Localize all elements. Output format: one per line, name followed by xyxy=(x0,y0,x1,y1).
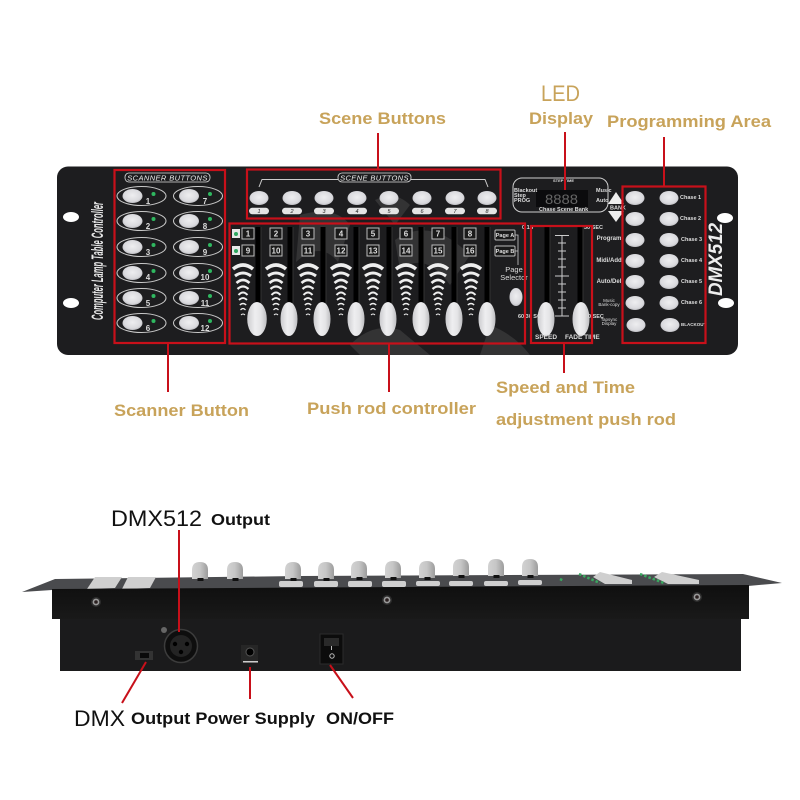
channel number boxes: 4 xyxy=(339,230,344,238)
function labels and bank arrows: BANK xyxy=(610,206,626,212)
panel: scanner buttons: 8 xyxy=(203,222,208,231)
label: DMX512 Output: Output xyxy=(211,512,271,529)
channel number boxes: 3 xyxy=(306,230,311,238)
panel: programming buttons: Chase 1 xyxy=(680,195,701,201)
function labels and bank arrows: Display xyxy=(602,321,617,326)
power switch xyxy=(320,634,343,664)
panel: speed and fade faders: 60 30 SC xyxy=(518,314,541,320)
panel: scanner buttons: 9 xyxy=(203,248,208,257)
panel: scene buttons: 6 xyxy=(420,209,424,215)
panel: speed and fade faders: 30 SEC xyxy=(584,225,603,231)
channel number boxes: 16 xyxy=(466,246,475,256)
scanner title: SCANNER BUTTONS xyxy=(127,174,208,182)
page selector: Page A xyxy=(496,233,514,239)
panel: speed and fade faders: FADE TIME xyxy=(565,334,600,341)
panel: scanner buttons: 11 xyxy=(201,299,210,308)
side text: DMX512: DMX512 xyxy=(706,223,727,296)
top plate xyxy=(22,574,782,592)
panel: scanner buttons: 6 xyxy=(146,324,151,333)
panel: scene buttons xyxy=(249,173,497,215)
page selector xyxy=(495,230,528,306)
heading: Scene Buttons: Scene Buttons xyxy=(319,109,446,128)
function labels and bank arrows: Midi/Add xyxy=(596,258,622,264)
channel number boxes: 6 xyxy=(404,230,409,238)
channel number boxes: 1 xyxy=(246,230,251,238)
panel body xyxy=(57,166,738,355)
label: Output Power Supply: Output Power Supply xyxy=(131,709,316,728)
panel: programming buttons: Chase 5 xyxy=(681,279,702,285)
panel: scanner buttons: 10 xyxy=(201,273,210,282)
panel: scene buttons: 3 xyxy=(322,209,326,215)
label: DMX512 Output: DMX512 xyxy=(111,506,202,531)
rear knobs xyxy=(192,559,538,581)
channel number boxes xyxy=(232,228,476,256)
label: DMX512 Output xyxy=(111,506,271,531)
panel: LED display: STEP TIME xyxy=(553,178,574,183)
function labels and bank arrows: Auto/Del xyxy=(597,279,622,285)
upper chassis xyxy=(52,585,749,619)
channel number boxes: 13 xyxy=(369,246,378,256)
panel: scanner buttons: 3 xyxy=(146,248,151,257)
page selector: Page B xyxy=(496,249,514,255)
channel number boxes: 2 xyxy=(274,230,279,238)
panel: LED display: Step xyxy=(514,193,527,199)
heading: Display: Display xyxy=(529,109,594,128)
panel: LED display: Music xyxy=(596,188,612,194)
device: front panel xyxy=(57,166,738,355)
function labels and bank arrows: Music xyxy=(603,298,616,303)
device: front panel: Computer Lamp Table Controller xyxy=(88,201,107,320)
channel number boxes: 5 xyxy=(371,230,376,238)
panel: scanner buttons: 2 xyxy=(146,222,151,231)
heading: Programming Area: Programming Area xyxy=(607,112,772,131)
channel number boxes: 14 xyxy=(402,246,411,256)
scene title xyxy=(259,173,488,187)
panel: speed and fade faders: 0.1S xyxy=(522,225,534,231)
heading: LED: LED xyxy=(541,81,580,106)
red highlight boxes xyxy=(114,170,706,344)
panel: programming buttons: BLACKOUT xyxy=(681,322,706,327)
channel number boxes: 7 xyxy=(436,230,441,238)
panel: programming buttons: Chase 6 xyxy=(681,300,702,306)
panel: scanner buttons: 5 xyxy=(146,299,151,308)
mounting holes xyxy=(63,212,734,308)
panel: scene buttons: 4 xyxy=(355,209,359,215)
panel: LED display xyxy=(513,178,612,213)
panel: scene buttons: 8 xyxy=(485,209,489,215)
label: Speed and Time: Speed and Time xyxy=(496,378,635,397)
screws xyxy=(91,592,702,607)
panel: scene buttons: 5 xyxy=(387,209,391,215)
label: adjustment push rod: adjustment push rod xyxy=(496,410,676,429)
panel: speed and fade faders xyxy=(518,225,604,341)
device: rear panel xyxy=(22,559,782,671)
panel: scanner buttons: 1 xyxy=(146,197,151,206)
watermark xyxy=(296,196,530,355)
flat button tops xyxy=(87,572,699,589)
channel number boxes: 12 xyxy=(337,246,346,256)
label: ON/OFF: ON/OFF xyxy=(326,709,394,728)
scene title: SCENE BUTTONS xyxy=(340,174,409,182)
fader knobs xyxy=(247,302,496,336)
channel number boxes: 9 xyxy=(246,246,251,256)
label: DMX: DMX xyxy=(74,706,125,731)
leader lines: rear panel xyxy=(122,530,353,703)
page selector: Page xyxy=(505,265,523,274)
function labels and bank arrows: Program xyxy=(597,236,621,242)
channel number boxes: 10 xyxy=(272,246,281,256)
panel: scene buttons: 1 xyxy=(257,209,261,215)
label: Push rod controller: Push rod controller xyxy=(307,399,476,418)
panel: LED display: Auto xyxy=(596,198,609,204)
DMX output port xyxy=(135,651,153,660)
panel: programming buttons xyxy=(626,191,706,332)
panel: LED display: Chase Scene Bank xyxy=(539,207,589,213)
power jack xyxy=(241,645,258,663)
panel: programming buttons: Chase 2 xyxy=(680,216,701,222)
lower chassis xyxy=(60,619,741,671)
leader lines: front panel xyxy=(168,132,664,392)
panel: scene buttons: 7 xyxy=(453,209,457,215)
panel: LED display: Blackout xyxy=(514,188,537,194)
channel number boxes: 8 xyxy=(468,230,473,238)
function labels and bank arrows xyxy=(596,192,626,326)
panel: scene buttons: 2 xyxy=(289,209,294,215)
function labels and bank arrows: Tapsync xyxy=(601,317,618,322)
channel number boxes: 15 xyxy=(434,246,443,256)
panel: scanner buttons: 7 xyxy=(203,197,208,206)
panel: speed and fade faders: SPEED xyxy=(535,334,557,341)
label: Scanner Button: Scanner Button xyxy=(114,401,249,420)
panel: speed and fade faders: 0 SEC xyxy=(588,314,604,320)
panel: push rod faders xyxy=(232,227,528,336)
panel: scanner buttons: 4 xyxy=(146,273,151,282)
panel: scanner buttons: 12 xyxy=(201,324,210,333)
channel number boxes: 11 xyxy=(304,246,313,256)
panel: programming buttons: Chase 4 xyxy=(681,258,703,264)
page selector: Selector xyxy=(500,273,528,282)
panel: LED display: PROG xyxy=(514,198,530,204)
green LEDs xyxy=(560,574,664,583)
XLR connector xyxy=(161,627,198,662)
function labels and bank arrows: Bank-copy xyxy=(598,302,620,307)
panel: LED display: 8888 xyxy=(545,191,578,207)
panel: scanner buttons xyxy=(117,173,222,333)
panel: programming buttons: Chase 3 xyxy=(681,237,702,243)
